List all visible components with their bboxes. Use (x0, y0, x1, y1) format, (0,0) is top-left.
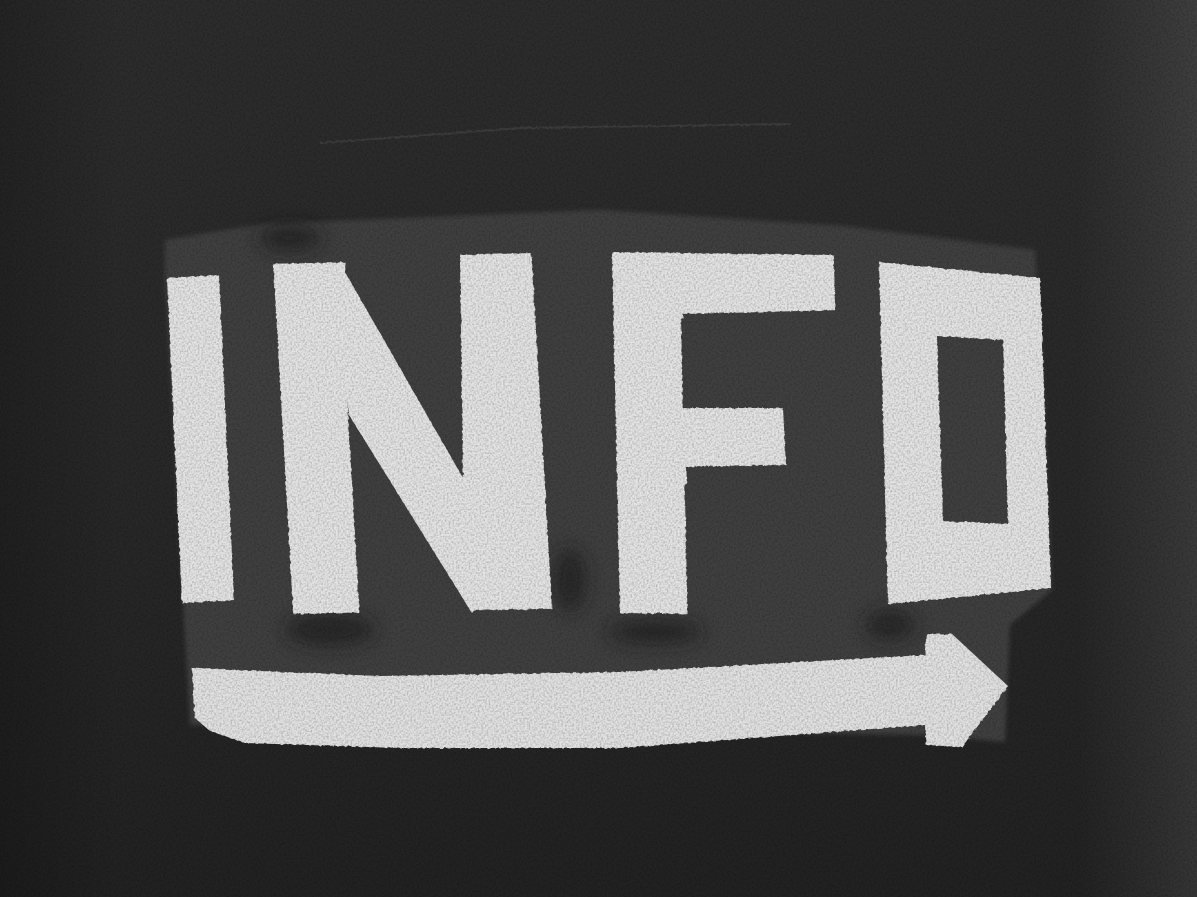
letter I: I (138, 172, 263, 705)
letter O (878, 262, 1051, 604)
letter N: N (246, 160, 579, 711)
arrow (192, 634, 1008, 748)
darker painted panel behind letters (165, 210, 1052, 742)
letter F: F (584, 144, 857, 721)
faint scratch marks (320, 124, 790, 143)
dark stains on panel (258, 225, 915, 646)
letter O: O (847, 95, 1081, 765)
painted sign lettering and arrow (166, 252, 1051, 749)
